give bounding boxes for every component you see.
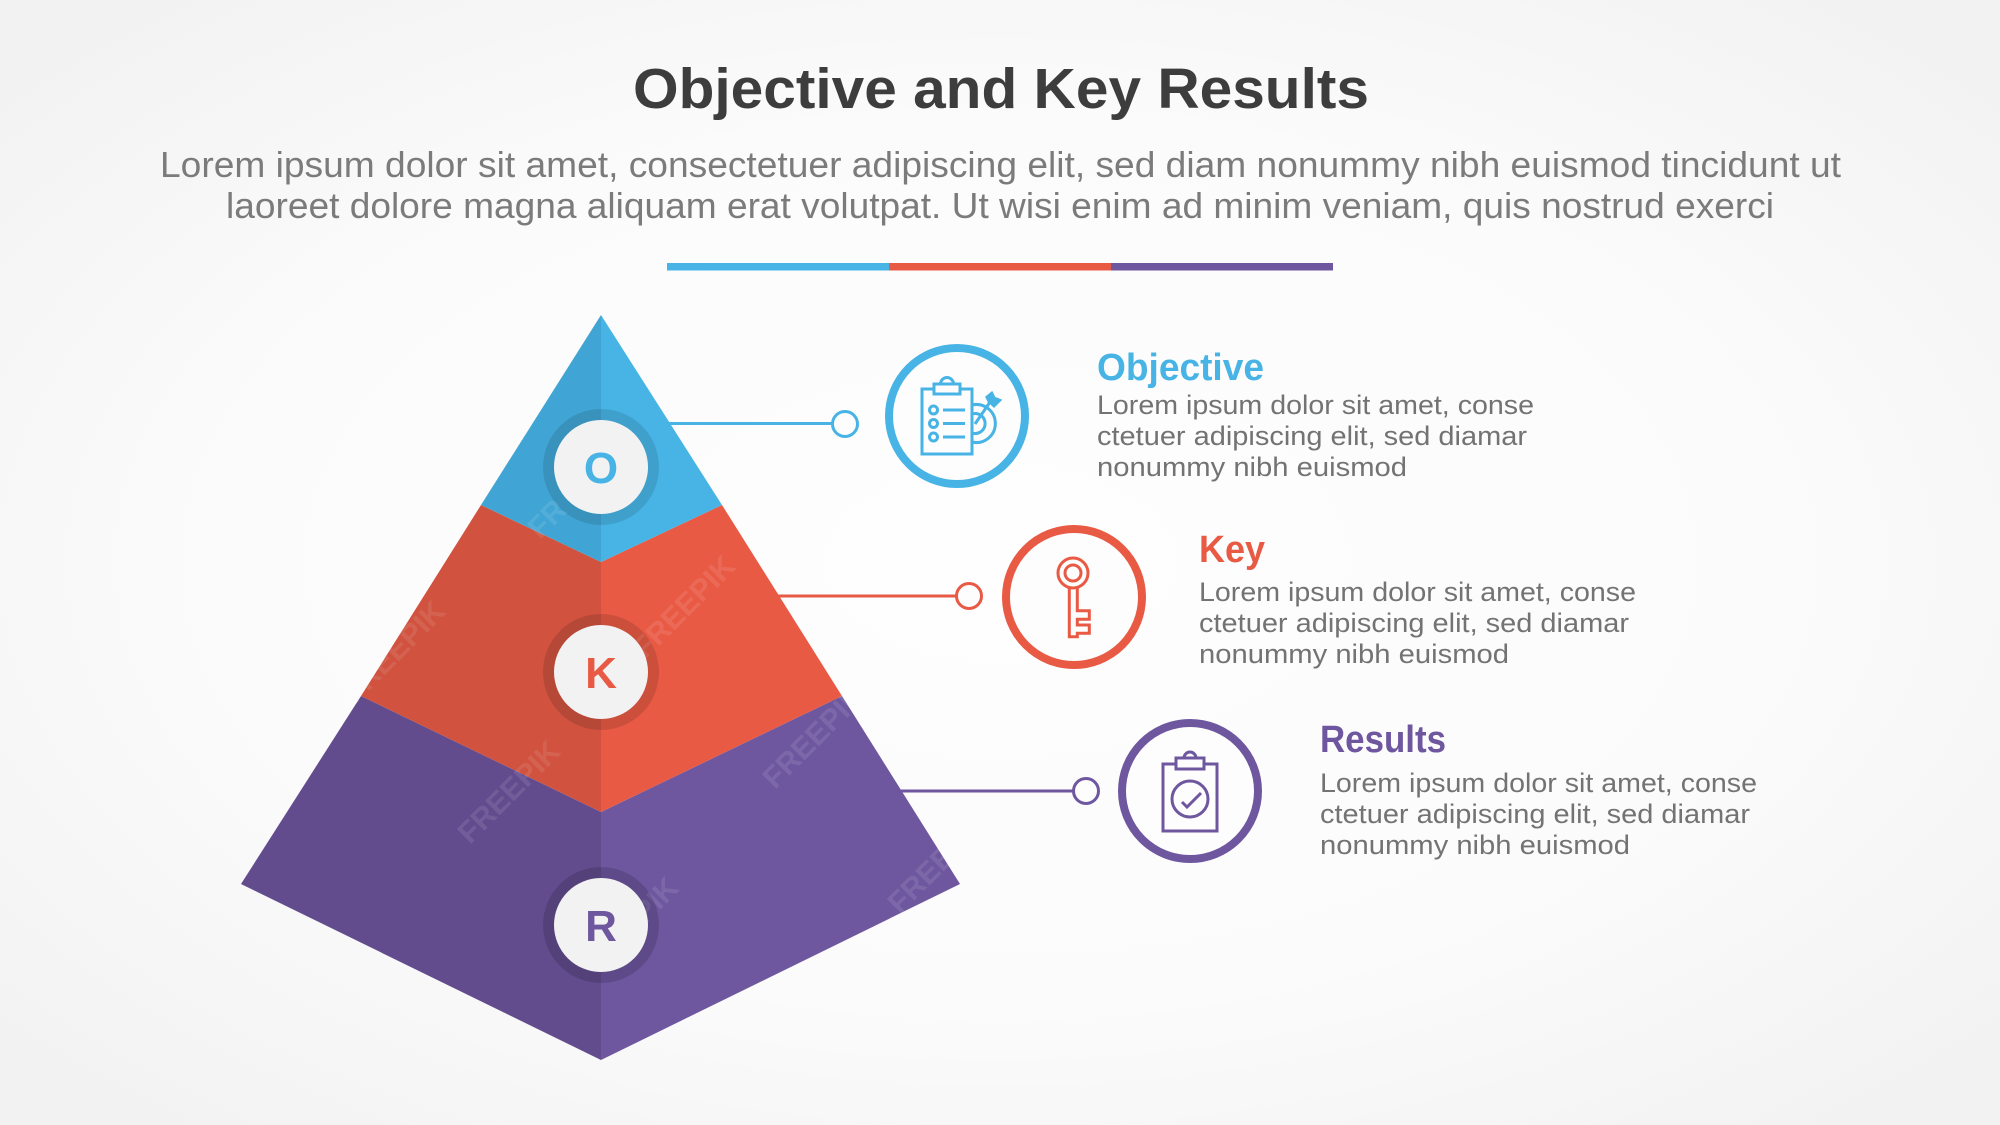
pyramid layer: key — [361, 505, 842, 812]
watermark — [337, 493, 997, 930]
heading: key: Key — [1199, 529, 1265, 571]
pyramid layer: results — [241, 696, 960, 1060]
subtitle text: Lorem ipsum dolor sit amet, consectetuer adipiscing elit, sed diam nonummy nibh euismod tincidunt ut — [160, 144, 1841, 185]
pyramid layer: objective — [481, 315, 722, 562]
text block: objective: nonummy nibh euismod — [1097, 452, 1407, 482]
text block: objective: Lorem ipsum dolor sit amet, conse — [1097, 390, 1534, 420]
badge: K — [543, 614, 659, 730]
badge: O: O — [584, 444, 618, 493]
connector: key — [778, 584, 982, 608]
heading: results: Results — [1320, 719, 1446, 761]
tricolor divider bar — [667, 263, 1333, 270]
watermark: FREEPIK — [627, 549, 742, 665]
badge: R: R — [585, 902, 617, 951]
watermark: FREEPIK — [882, 804, 997, 920]
text block: key: nonummy nibh euismod — [1199, 639, 1509, 669]
badge: K: K — [585, 649, 617, 698]
connector: results — [901, 778, 1098, 804]
text block: objective — [1097, 347, 1534, 482]
icon: results clipboard with check — [1122, 723, 1258, 859]
text block: results — [1320, 719, 1757, 860]
watermark: FR — [522, 493, 573, 545]
text block: results: ctetuer adipiscing elit, sed diamar — [1320, 799, 1750, 829]
icon: key — [1006, 529, 1142, 665]
watermark: PIK — [627, 871, 686, 930]
badge: R — [543, 867, 659, 983]
connector: objective — [668, 412, 858, 436]
badge: O — [543, 409, 659, 525]
text block: key: Lorem ipsum dolor sit amet, conse — [1199, 577, 1636, 607]
text block: results: nonummy nibh euismod — [1320, 830, 1630, 860]
watermark: FREEPIK — [452, 734, 567, 850]
text block: key: ctetuer adipiscing elit, sed diamar — [1199, 608, 1629, 638]
text block: objective: ctetuer adipiscing elit, sed diamar — [1097, 421, 1527, 451]
watermark: FREEPIK — [757, 679, 872, 795]
title: Objective and Key Results — [633, 57, 1369, 121]
text block: key — [1199, 529, 1636, 669]
text block: results: Lorem ipsum dolor sit amet, conse — [1320, 768, 1757, 798]
heading: objective: Objective — [1097, 347, 1264, 389]
pyramid — [241, 315, 997, 1060]
subtitle text: laoreet dolore magna aliquam erat volutpat. Ut wisi enim ad minim veniam, quis nostrud exerci — [226, 185, 1774, 226]
subtitle text — [160, 144, 1841, 226]
watermark: FREEPIK — [337, 594, 452, 710]
icon: objective clipboard with target — [889, 348, 1025, 484]
